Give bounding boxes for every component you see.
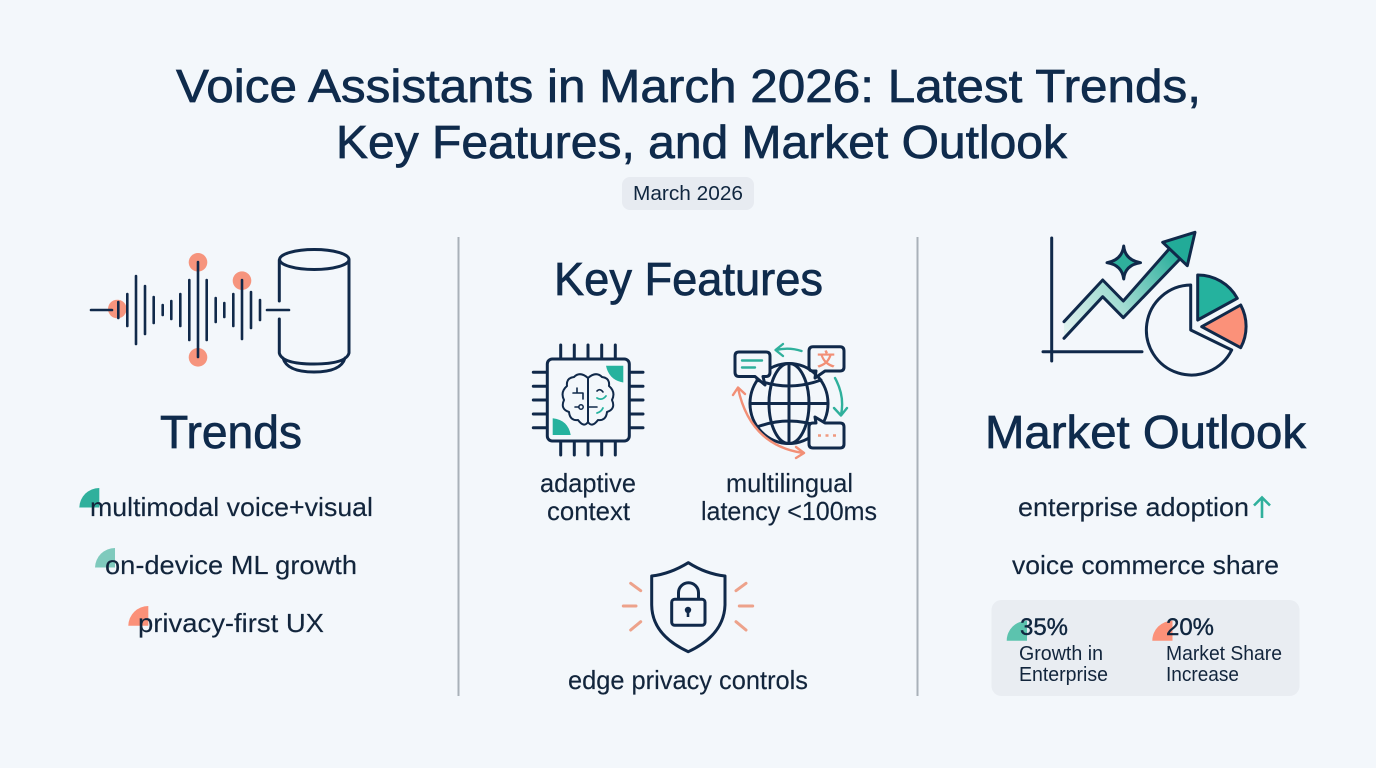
heading: key features: Key Features: [554, 253, 823, 305]
panel: trends: [79, 250, 373, 638]
stat card: [992, 600, 1300, 696]
title: Voice Assistants in March 2026: Latest Trends,: [176, 60, 1201, 112]
feature: edge privacy controls: [568, 563, 808, 695]
icon: growth chart and pie: [1043, 232, 1246, 375]
heading: market outlook: Market Outlook: [985, 406, 1307, 458]
date badge: [622, 177, 754, 210]
bullet: multimodal voice+visual: multimodal voice+visual: [90, 492, 373, 522]
bullet: privacy-first UX: privacy-first UX: [138, 608, 324, 638]
label: multilingual latency: multilingual: [726, 468, 853, 498]
item: enterprise adoption with up arrow: enterprise adoption: [1018, 492, 1249, 522]
stat: 20% market share increase: 20%: [1166, 614, 1214, 641]
panel: market outlook: [985, 232, 1307, 696]
label: adaptive context: [540, 468, 636, 526]
label: adaptive context: adaptive: [540, 468, 636, 498]
label: adaptive context: context: [547, 496, 631, 526]
icon: voice waveform and smart speaker: [91, 250, 349, 372]
label: multilingual latency: [701, 468, 877, 526]
stat: 35% growth in enterprise: Growth in: [1019, 643, 1103, 665]
stat: 35% growth in enterprise: Enterprise: [1019, 664, 1108, 686]
stat: 35% growth in enterprise: 35%: [1020, 614, 1068, 641]
panel: key features: [533, 253, 877, 695]
title: [176, 60, 1201, 168]
icon: shield with padlock: [623, 563, 753, 652]
feature: multilingual latency: [701, 344, 877, 526]
icon: AI chip with brain: [533, 345, 643, 455]
feature: adaptive context: [533, 345, 643, 526]
title: Key Features, and Market Outlook: [336, 116, 1068, 168]
date badge: March 2026: [633, 183, 743, 205]
icon: globe with translation bubbles: 文: [817, 349, 835, 370]
stat: 20% market share increase: Market Share: [1166, 643, 1282, 665]
label: multilingual latency: latency <100ms: [701, 496, 877, 526]
item: voice commerce share: voice commerce share: [1012, 550, 1279, 580]
stat: 20% market share increase: Increase: [1166, 664, 1239, 686]
stat: 35% growth in enterprise: [1007, 614, 1108, 686]
stat: 20% market share increase: [1152, 614, 1282, 686]
icon: globe with translation bubbles: [733, 344, 847, 458]
bullet: on-device ML growth: on-device ML growth: [105, 550, 357, 580]
heading: trends: Trends: [160, 406, 302, 458]
label: edge privacy controls: edge privacy controls: [568, 665, 808, 695]
